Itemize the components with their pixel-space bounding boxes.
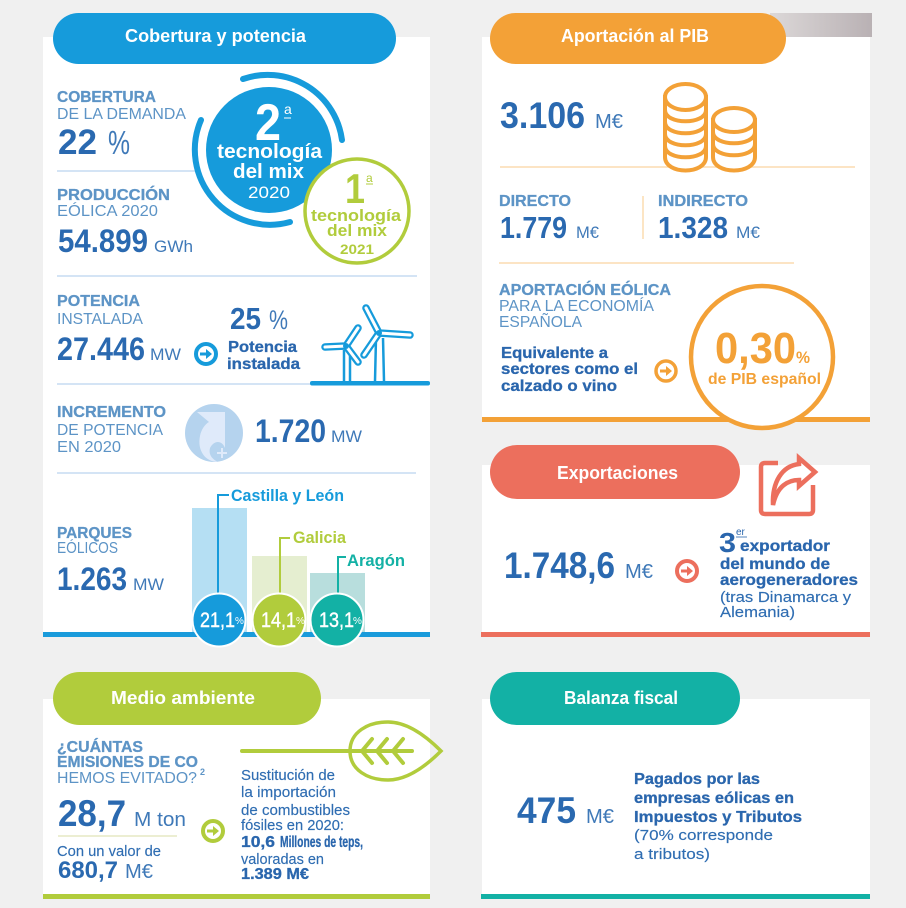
stat: incremento de potencia: DE POTENCIA <box>57 422 164 439</box>
text: 3er exportador: (tras Dinamarca y <box>720 589 852 606</box>
stat: potencia instalada: POTENCIA <box>57 293 140 310</box>
stat: cobertura de la demanda: % <box>108 124 130 161</box>
stat: 25 % potencia instalada: 25 <box>230 301 261 336</box>
stat: producción eólica 2020: PRODUCCIÓN <box>57 186 170 204</box>
text: aportación eólica: ESPAÑOLA <box>499 314 583 331</box>
stat: producción eólica 2020: GWh <box>154 237 193 256</box>
stat: producción eólica 2020 <box>57 186 193 259</box>
stat: 28,7 M ton <box>58 793 186 834</box>
decorative corner <box>770 13 872 37</box>
badge: 2ª tecnología del mix 2020: 2020 <box>248 183 290 202</box>
stat: incremento de potencia: MW <box>331 427 362 446</box>
stat: cobertura de la demanda: DE LA DEMANDA <box>57 106 187 123</box>
text: sustitución de importación: fósiles en 2020: <box>241 817 344 834</box>
stat: 25 % potencia instalada: instalada <box>227 356 300 373</box>
icon: arrow <box>196 344 216 364</box>
panel: aportación al PIB <box>482 13 870 428</box>
stat: 475 M€ <box>517 790 614 831</box>
text: pagados por las empresas: Impuestos y Tributos <box>634 809 802 826</box>
badge: 2ª tecnología del mix 2020 <box>195 75 342 225</box>
badge: 1ª tecnología del mix 2021 <box>305 159 409 263</box>
text: pagados por las empresas: Pagados por las <box>634 771 760 788</box>
stat: valor 680,7 M€: M€ <box>125 861 153 883</box>
badge: 1ª tecnología del mix 2021: 2021 <box>340 241 374 257</box>
stat: cobertura de la demanda: COBERTURA <box>57 89 156 106</box>
panel: exportaciones <box>481 445 870 637</box>
panel: cobertura y potencia <box>43 13 430 646</box>
heading: aportación al PIB: Aportación al PIB <box>561 26 709 46</box>
heading: cobertura y potencia: Cobertura y potencia <box>125 26 307 46</box>
badge: 1ª tecnología del mix 2021: del mix <box>327 221 388 240</box>
badge: 1ª tecnología del mix 2021: 1 <box>345 165 365 212</box>
text: sustitución de importación: 1.389 M€ <box>241 866 309 883</box>
text: aportación eólica <box>499 281 671 331</box>
text: sustitución de importación: 10,6 <box>241 834 275 851</box>
panel: balanza fiscal <box>481 672 870 899</box>
stat: parques eólicos: 1.263 <box>57 561 127 597</box>
text: cuántas emisiones: EMISIONES DE CO <box>57 754 198 771</box>
heading: exportaciones: Exportaciones <box>557 463 678 483</box>
badge: 2ª tecnología del mix 2020: a <box>284 101 292 117</box>
text: sustitución de importación: de combustibles <box>241 802 350 819</box>
text: cuántas emisiones: ¿CUÁNTAS <box>57 739 143 756</box>
stat: potencia instalada: MW <box>150 345 181 364</box>
text: pagados por las empresas <box>634 771 802 863</box>
text: cuántas emisiones: 2 <box>200 767 205 777</box>
stat: parques eólicos: PARQUES <box>57 525 132 542</box>
bar chart: parques por comunidad: % <box>235 616 244 627</box>
stat: incremento de potencia <box>57 404 362 456</box>
text: sustitución de importación <box>241 767 363 883</box>
stat: valor 680,7 M€: Con un valor de <box>57 843 161 860</box>
badge: 2ª tecnología del mix 2020: 2 <box>255 94 281 152</box>
stat: potencia instalada: 27.446 <box>57 331 145 367</box>
bar chart: parques por comunidad <box>192 486 405 646</box>
heading: balanza fiscal: Balanza fiscal <box>564 688 678 708</box>
stat: producción eólica 2020: 54.899 <box>58 223 148 259</box>
text: 3er exportador: exportador <box>740 538 830 555</box>
bar chart: parques por comunidad: 14,1 <box>261 609 296 632</box>
stat: directo: 1.779 <box>500 210 567 245</box>
text: sustitución de importación: Sustitución de <box>241 767 335 784</box>
badge: 0,30 % de PIB español: de PIB español <box>708 371 821 388</box>
badge: 1ª tecnología del mix 2021: tecnología <box>311 206 402 225</box>
stat: directo <box>499 193 600 245</box>
stat: 25 % potencia instalada: % <box>269 305 288 335</box>
stat: producción eólica 2020: EÓLICA 2020 <box>57 203 158 220</box>
stat: parques eólicos: EÓLICOS <box>57 540 118 557</box>
heading: exportaciones <box>490 445 740 499</box>
stat: 25 % potencia instalada: Potencia <box>228 339 297 356</box>
text: 3er exportador: er <box>736 527 746 538</box>
icon: incremento <box>185 404 243 462</box>
stat: 475 M€: M€ <box>586 806 614 828</box>
stat: valor 680,7 M€: 680,7 <box>58 857 118 884</box>
stat: 3.106 M€: M€ <box>595 111 623 133</box>
text: pagados por las empresas: (70% corresponde <box>634 827 773 844</box>
stat: potencia instalada: INSTALADA <box>57 311 144 328</box>
badge: 0,30 % de PIB español <box>691 286 833 428</box>
bar chart: parques por comunidad: Aragón <box>347 551 405 570</box>
stat: parques eólicos <box>57 525 164 597</box>
icon: export arrow <box>761 458 815 514</box>
bar chart: parques por comunidad: % <box>296 616 305 627</box>
stat: 475 M€: 475 <box>517 790 576 831</box>
text: cuántas emisiones <box>57 739 205 787</box>
badge: 1ª tecnología del mix 2021: a <box>366 171 373 185</box>
heading: cobertura y potencia <box>53 13 396 64</box>
text: sustitución de importación: Millones de teps, <box>280 834 363 851</box>
stat: cobertura de la demanda <box>57 89 187 162</box>
badge: 2ª tecnología del mix 2020: tecnología <box>217 141 323 163</box>
stat: directo: DIRECTO <box>499 193 571 210</box>
icon: arrow <box>203 821 223 841</box>
stat: 3.106 M€: 3.106 <box>500 95 585 136</box>
stat: valor 680,7 M€ <box>57 843 161 884</box>
stat: 25 % potencia instalada <box>227 301 300 373</box>
text: sustitución de importación: la importación <box>241 784 336 801</box>
heading: aportación al PIB <box>490 13 786 64</box>
stat: indirecto: M€ <box>736 223 761 242</box>
text: 3er exportador: aerogeneradores <box>720 572 858 589</box>
stat: 28,7 M ton: M ton <box>134 809 186 831</box>
text: pagados por las empresas: empresas eólicas en <box>634 790 794 807</box>
stat: 1.748,6 M€: 1.748,6 <box>504 545 615 586</box>
text: sustitución de importación: valoradas en <box>241 851 324 868</box>
panel: medio ambiente <box>43 672 441 899</box>
text: 3er exportador <box>719 527 858 621</box>
text: cuántas emisiones: HEMOS EVITADO? <box>57 770 197 787</box>
heading: medio ambiente <box>53 672 321 725</box>
text: equivalente a sectores: Equivalente a <box>501 345 608 362</box>
text: aportación eólica: APORTACIÓN EÓLICA <box>499 281 671 299</box>
text: aportación eólica: PARA LA ECONOMÍA <box>499 298 655 315</box>
bar chart: parques por comunidad: 21,1 <box>200 609 235 632</box>
stat: cobertura de la demanda: 22 <box>58 123 97 162</box>
stat: incremento de potencia: 1.720 <box>255 413 326 449</box>
heading: balanza fiscal <box>490 672 740 725</box>
icon: wind turbines <box>310 308 430 386</box>
stat: incremento de potencia: INCREMENTO <box>57 404 166 421</box>
bar chart: parques por comunidad: Galicia <box>293 528 347 547</box>
text: equivalente a sectores: calzado o vino <box>501 378 617 395</box>
icon: arrow <box>677 561 697 581</box>
stat: indirecto: INDIRECTO <box>658 193 748 210</box>
icon: coins <box>665 84 755 170</box>
stat: incremento de potencia: EN 2020 <box>57 439 121 456</box>
text: equivalente a sectores: sectores como el <box>501 361 638 378</box>
text: 3er exportador: del mundo de <box>720 556 830 573</box>
heading: medio ambiente: Medio ambiente <box>111 688 255 708</box>
text: equivalente a sectores <box>501 345 638 395</box>
stat: potencia instalada <box>57 293 181 367</box>
stat: indirecto: 1.328 <box>658 210 728 245</box>
badge: 0,30 % de PIB español: % <box>796 348 810 367</box>
text: pagados por las empresas: a tributos) <box>634 846 710 863</box>
icon: leaf <box>242 722 441 780</box>
badge: 2ª tecnología del mix 2020: del mix <box>233 161 304 183</box>
stat: indirecto <box>658 193 761 245</box>
stat: directo: M€ <box>576 223 600 242</box>
text: 3er exportador: 3 <box>719 527 736 558</box>
bar chart: parques por comunidad: Castilla y León <box>231 486 344 505</box>
icon: arrow <box>656 361 676 381</box>
stat: 28,7 M ton: 28,7 <box>58 793 126 834</box>
bar chart: parques por comunidad: 13,1 <box>319 609 354 632</box>
badge: 0,30 % de PIB español: 0,30 <box>715 324 796 373</box>
stat: 1.748,6 M€: M€ <box>625 561 653 583</box>
text: 3er exportador: Alemania) <box>720 604 795 621</box>
bar chart: parques por comunidad: % <box>353 616 362 627</box>
stat: parques eólicos: MW <box>133 575 164 594</box>
